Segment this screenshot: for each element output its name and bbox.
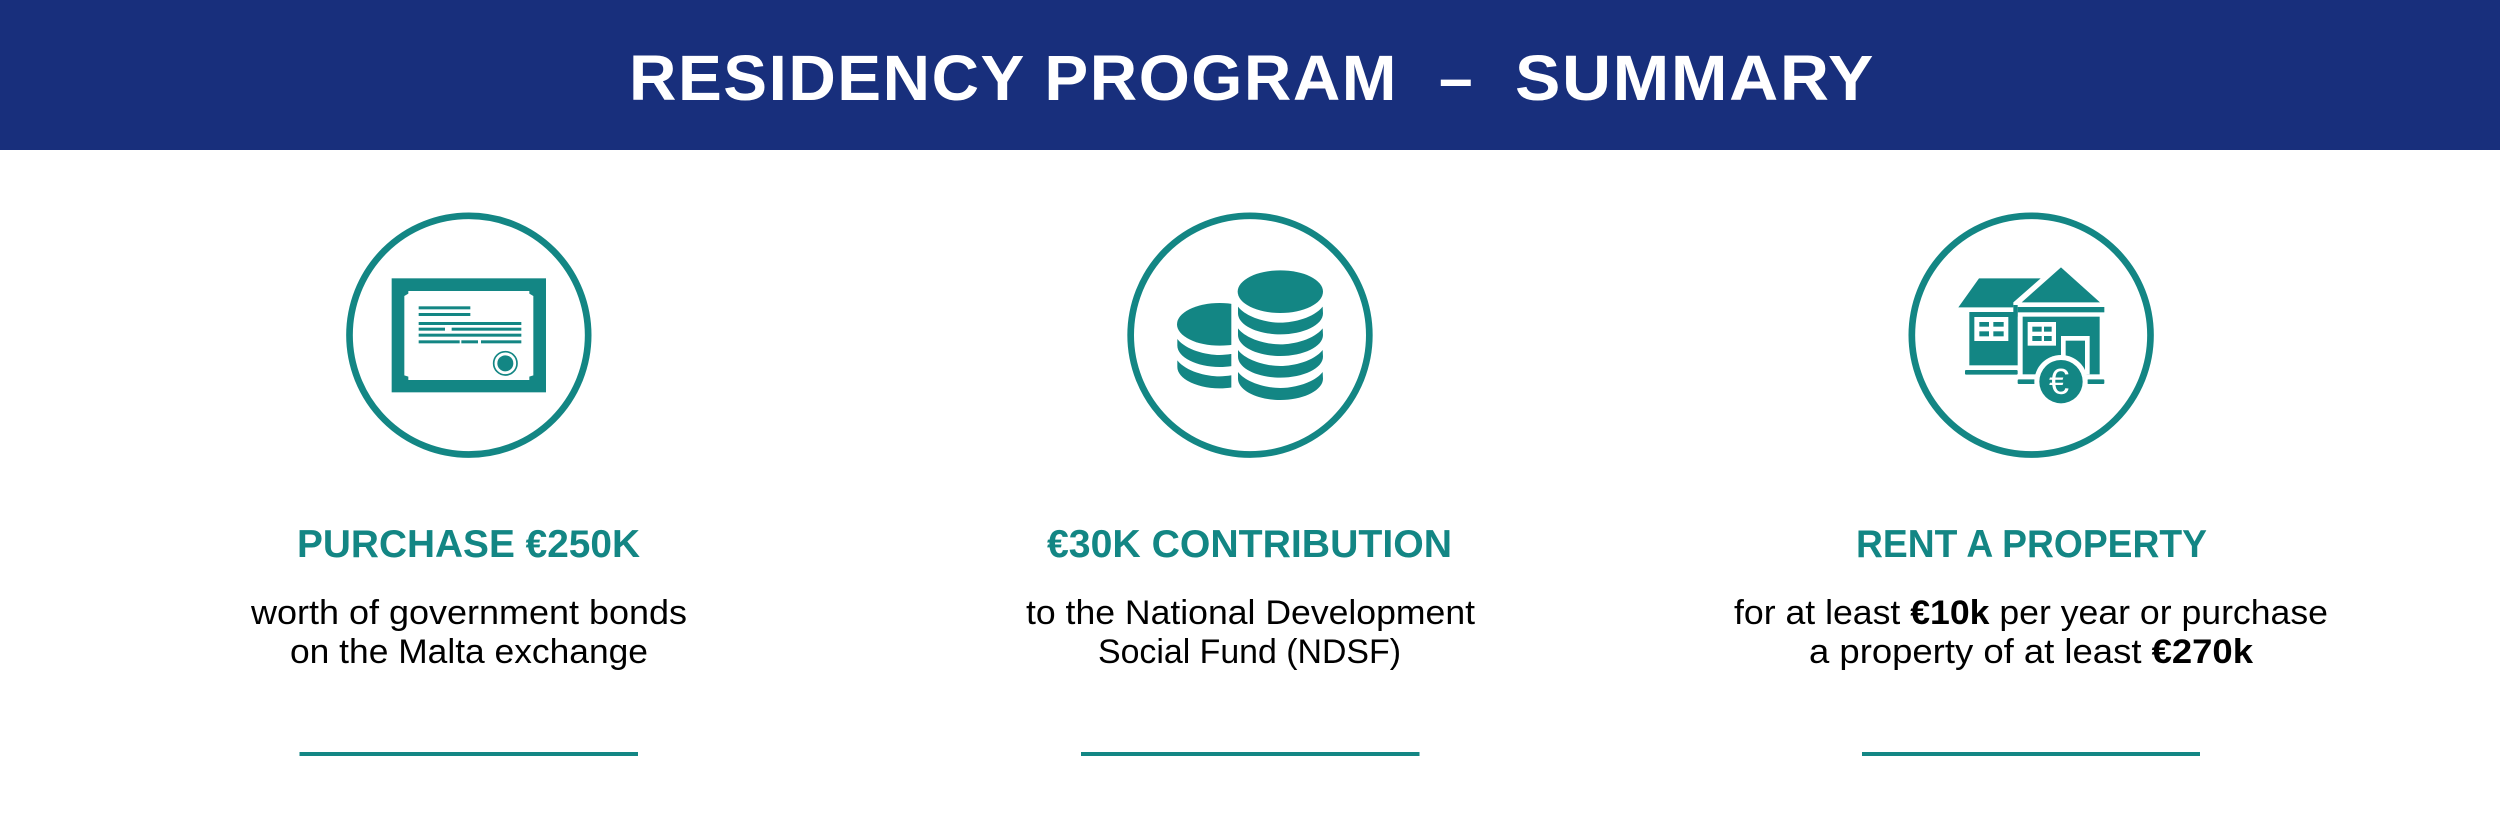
- text block: [1734, 594, 2328, 671]
- title: SUMMARY: [1515, 42, 1875, 114]
- panel: NDSF contribution: [1026, 216, 1476, 756]
- panel: purchase government bonds: [250, 216, 687, 756]
- text block: Social Fund (NDSF): [1098, 633, 1401, 671]
- header banner: [0, 0, 2500, 150]
- heading: €30K CONTRIBUTION: [1047, 523, 1452, 566]
- icon: coin stacks: [1131, 216, 1369, 454]
- text block: for at least €10k per year or purchase: [1734, 594, 2328, 632]
- text block: to the National Development: [1026, 594, 1476, 632]
- icon: houses with euro coin: [1912, 216, 2150, 454]
- icon: certificate: [349, 216, 588, 454]
- heading: PURCHASE €250K: [297, 523, 640, 566]
- title: [629, 42, 1875, 114]
- title: –: [1439, 42, 1474, 114]
- text block: [250, 594, 687, 671]
- text block: [1026, 594, 1476, 671]
- icon: houses with euro coin: €: [2049, 361, 2069, 402]
- panel: rent a property: [1734, 216, 2328, 756]
- text block: a property of at least €270k: [1809, 633, 2253, 671]
- heading: RENT A PROPERTY: [1856, 523, 2207, 566]
- text block: on the Malta exchange: [290, 633, 648, 671]
- text block: worth of government bonds: [250, 594, 687, 632]
- title: RESIDENCY PROGRAM: [629, 42, 1398, 114]
